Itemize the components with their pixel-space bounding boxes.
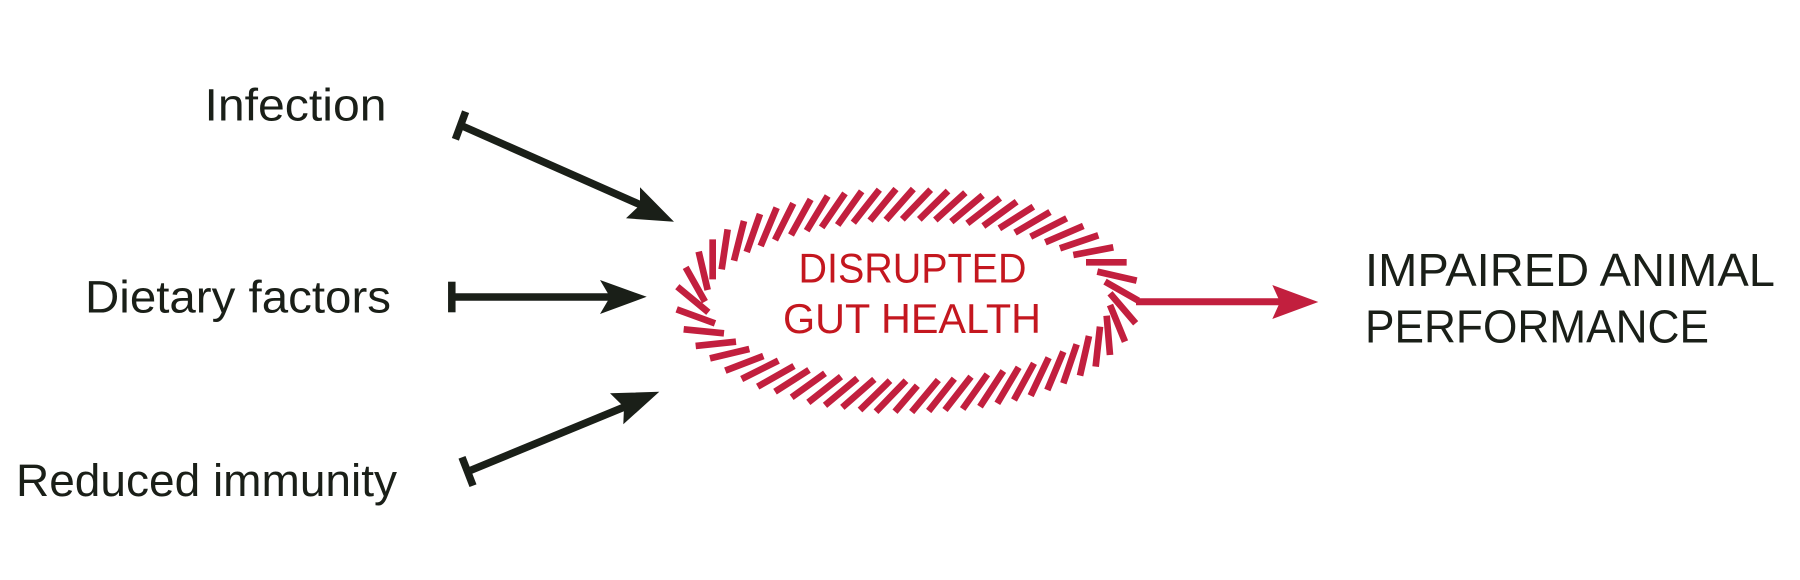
hatched ellipse: disrupted gut health ring (677, 189, 1138, 412)
text: DISRUPTED: DISRUPTED (798, 244, 1026, 292)
arrow: dietary factors to gut health (452, 280, 647, 314)
text: PERFORMANCE: PERFORMANCE (1365, 300, 1709, 352)
arrow: reduced immunity to gut health (462, 392, 659, 486)
text: IMPAIRED ANIMAL: IMPAIRED ANIMAL (1365, 244, 1775, 296)
arrow: gut health to impaired performance (1136, 285, 1318, 319)
arrow: infection to gut health (455, 112, 674, 222)
text: GUT HEALTH: GUT HEALTH (783, 295, 1041, 342)
label: Infection: Infection (204, 80, 386, 130)
label: Dietary factors: Dietary factors (85, 272, 391, 322)
label: Reduced immunity: Reduced immunity (16, 455, 398, 506)
